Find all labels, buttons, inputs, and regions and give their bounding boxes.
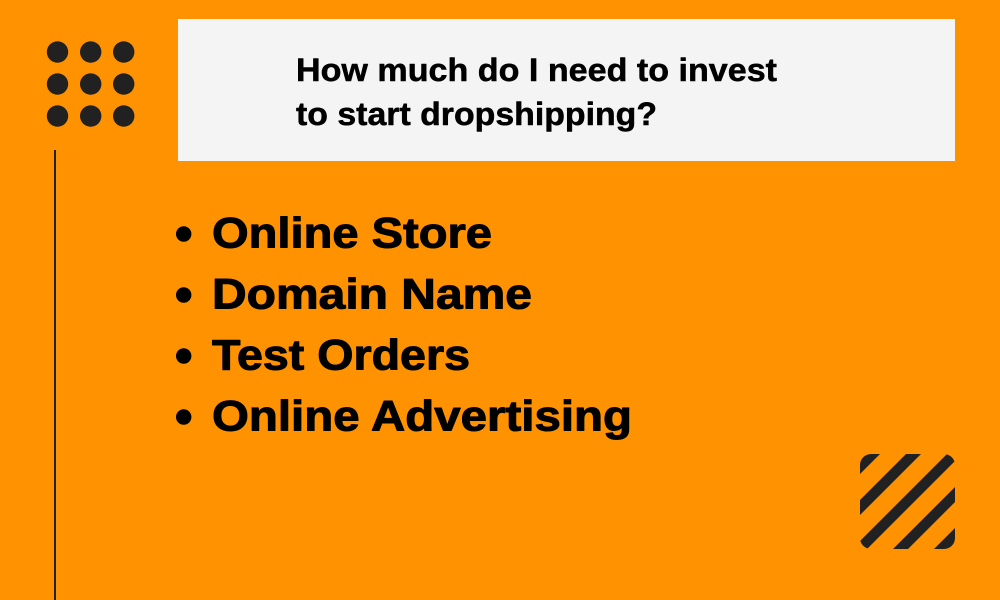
bullet: Test Orders: Test Orders: [212, 332, 470, 380]
heading line 2: to start dropshipping?: [296, 96, 657, 132]
bullet: Domain Name: Domain Name: [212, 270, 532, 318]
bullet: Online Store: Online Store: [212, 210, 492, 258]
heading line 1: How much do I need to invest: [296, 52, 777, 88]
bullet list: [176, 210, 632, 440]
icon: dot grid: [47, 41, 134, 127]
panel: heading box: [178, 19, 955, 161]
vertical line: [54, 150, 56, 600]
bullet: Online Advertising: Online Advertising: [212, 392, 632, 440]
icon: striped square: [860, 454, 955, 549]
